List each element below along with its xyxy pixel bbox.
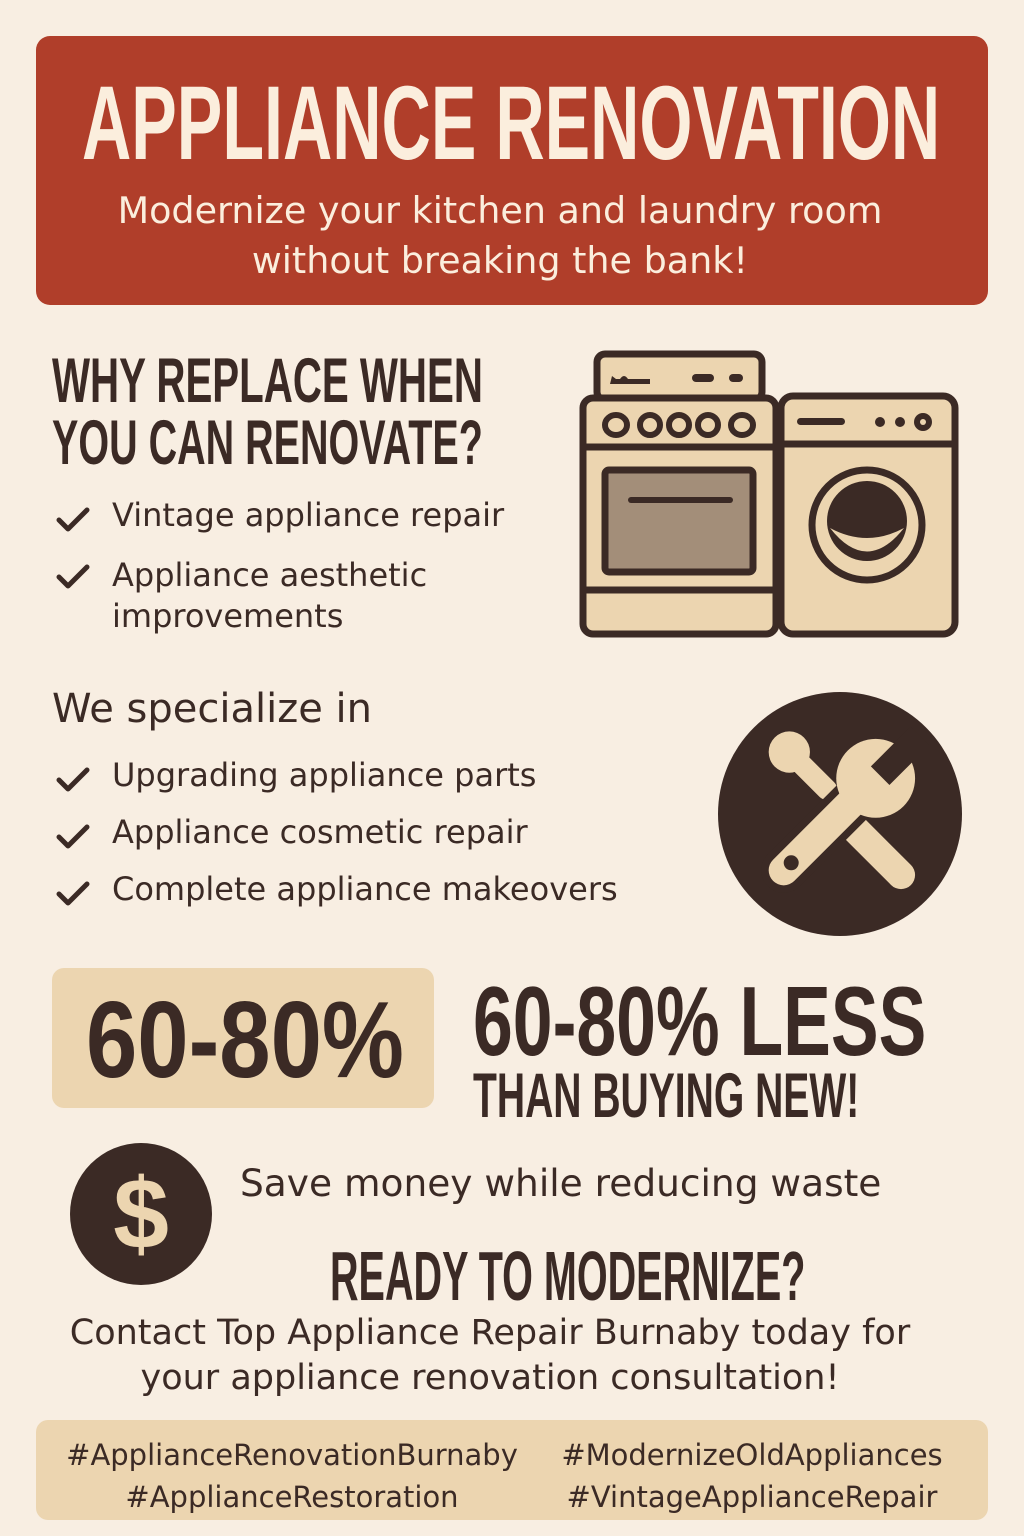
heading: why replace: WHY REPLACE WHEN (52, 346, 483, 416)
hashtag box: #ApplianceRestoration (125, 1480, 459, 1514)
hashtag box (36, 1420, 988, 1520)
hashtag box: #ModernizeOldAppliances (561, 1438, 943, 1472)
text: contact: your appliance renovation consultation! (140, 1358, 840, 1398)
checklist: renovate: Appliance aesthetic (112, 556, 427, 594)
checklist: renovate: improvements (112, 597, 343, 635)
title: APPLIANCE RENOVATION (82, 65, 940, 182)
hashtag box: #VintageApplianceRepair (567, 1480, 937, 1514)
subtitle: without breaking the bank! (252, 239, 748, 282)
checklist: specialties: Upgrading appliance parts (112, 756, 536, 794)
icon: wrench and screwdriver (718, 692, 962, 936)
heading: why replace: YOU CAN RENOVATE? (52, 408, 483, 478)
heading: why replace (52, 346, 483, 478)
text: save money: Save money while reducing waste (240, 1161, 881, 1205)
checklist: specialties: Appliance cosmetic repair (112, 813, 528, 851)
subtitle (118, 189, 882, 282)
text: contact: Contact Top Appliance Repair Burnaby today for (70, 1313, 910, 1353)
checklist: renovate: Vintage appliance repair (112, 496, 504, 534)
checklist: renovate (56, 496, 504, 635)
checklist: specialties: Complete appliance makeovers (112, 870, 618, 908)
stat badge: 60-80%: 60-80% (86, 979, 404, 1101)
text: contact (70, 1313, 910, 1398)
subtitle: Modernize your kitchen and laundry room (118, 189, 882, 232)
header banner (36, 36, 988, 305)
icon: dollar: $ (113, 1158, 169, 1270)
heading: ready to modernize: READY TO MODERNIZE? (330, 1237, 805, 1315)
stat text: less than buying new: THAN BUYING NEW! (473, 1061, 859, 1131)
hashtag box: #ApplianceRenovationBurnaby (66, 1438, 518, 1472)
stat text: less than buying new: 60-80% LESS (473, 966, 926, 1076)
heading: we specialize in: We specialize in (52, 686, 372, 732)
icon: dollar (70, 1143, 212, 1285)
stat text: less than buying new (473, 966, 926, 1131)
checklist: specialties (56, 756, 618, 908)
icon: stove and washer (580, 350, 958, 638)
